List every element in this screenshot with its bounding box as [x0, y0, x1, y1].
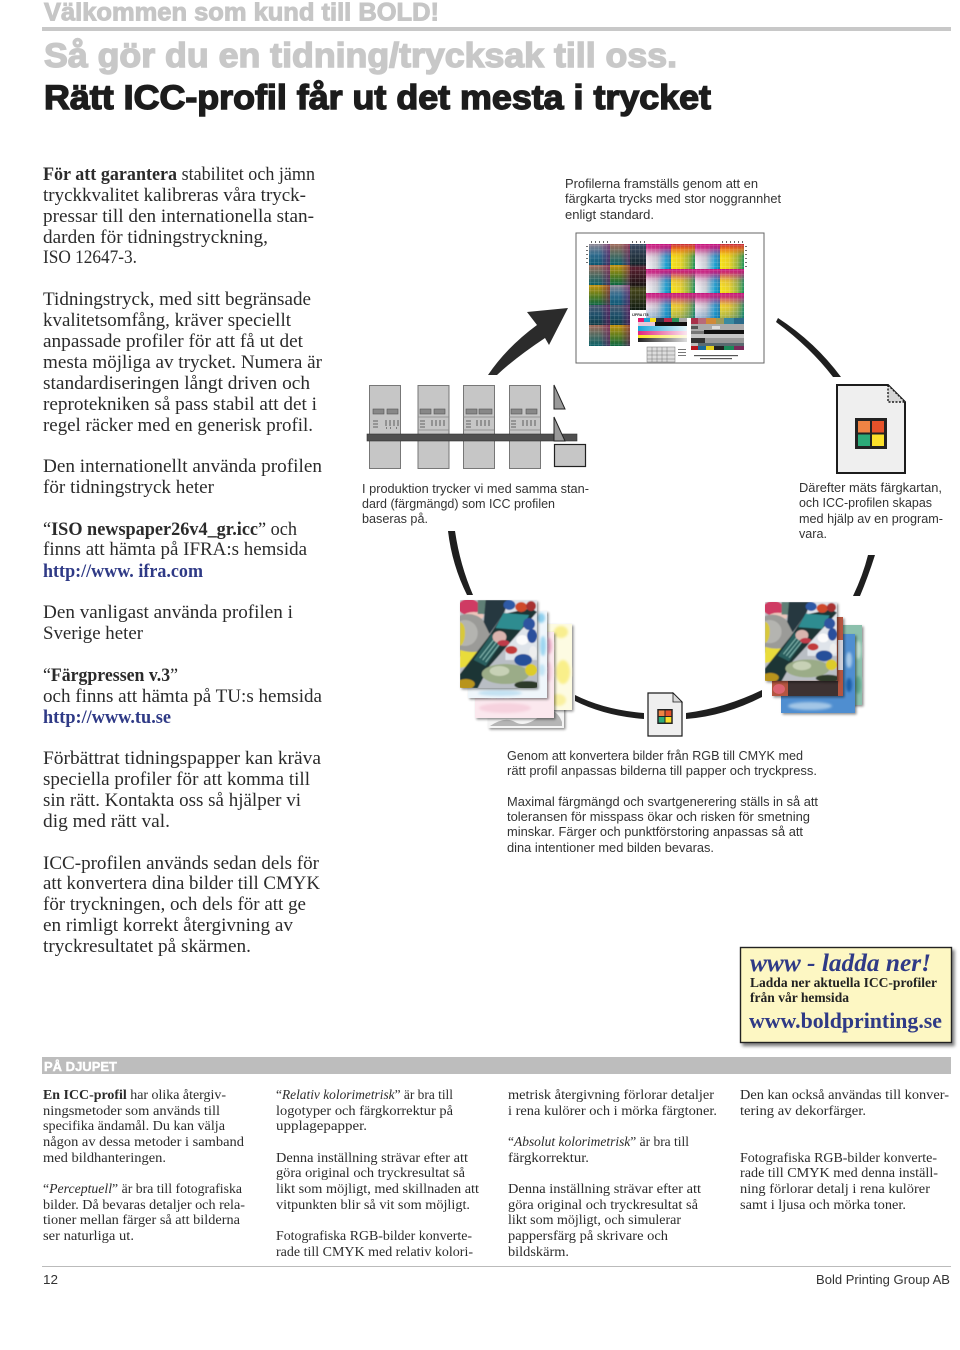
text block: main article column: en rimligt korrekt återgivning av	[43, 916, 294, 936]
text block: main article column: speciella profiler för att komma till	[43, 770, 310, 790]
section bar: på djupet	[42, 1057, 951, 1074]
text column 1: någon av dessa metoder i samband	[43, 1134, 244, 1149]
caption: conversion: rätt profil anpassas bilderna till papper och tryckpress.	[507, 764, 817, 778]
callout: download box: Ladda ner aktuella ICC-profiler	[750, 976, 937, 991]
text block: main article column: standardiseringen långt driven och	[43, 374, 310, 394]
text block: main article column: Den vanligast använda profilen i	[43, 603, 293, 623]
caption: production: dard (färgmängd) som ICC profilen	[362, 497, 555, 511]
caption: colour chart	[565, 177, 782, 222]
arc: press to images	[448, 531, 473, 595]
text block: main article column: sin rätt. Kontakta oss så hjälper vi	[43, 791, 301, 811]
caption: measuring: och ICC-profilen skapas	[799, 496, 932, 510]
arc: images to small profile	[575, 695, 644, 719]
sheet: blue	[781, 634, 855, 713]
title: Rätt ICC-profil får ut det mesta i trycket	[44, 79, 711, 117]
text block: main article column: Förbättrat tidningspapper kan kräva	[43, 749, 321, 769]
text block: main article column: http://www. ifra.com	[43, 562, 204, 582]
arrow: press to chart	[488, 308, 568, 375]
text block: main article column: “ISO newspaper26v4_gr.icc” och	[43, 520, 297, 540]
text block: main article column: och finns att hämta på TU:s hemsida	[43, 687, 322, 707]
text block: main article column: dig med rätt val.	[43, 812, 170, 832]
text column 2: vitpunkten blir så vit som möjligt.	[276, 1197, 470, 1212]
icon: small ICC profile file	[648, 693, 682, 736]
text block: main article column: Den internationellt använda profilen	[43, 457, 322, 477]
text column 3	[508, 1087, 717, 1259]
arc: small profile to images	[686, 690, 762, 719]
text block: main article column: tryckkvalitet kalibreras våra tryck-	[43, 186, 306, 206]
image stack: RGB original with CMYK separations	[446, 599, 572, 728]
text column 1: med bildhanteringen.	[43, 1150, 166, 1165]
callout: download box: www - ladda ner!	[750, 950, 931, 977]
text column 3: färgkorrektur.	[508, 1150, 589, 1165]
sheet: cyan separation	[468, 611, 547, 698]
sheet: magenta separation	[475, 632, 554, 718]
footer	[42, 1266, 951, 1287]
text column 2: Fotografiska RGB-bilder konverte-	[276, 1228, 472, 1243]
footer: Bold Printing Group AB	[816, 1273, 950, 1287]
text column 4: samt i ljusa och mörka toner.	[740, 1197, 906, 1212]
text block: main article column: för tryckningen, och dels för att ge	[43, 895, 306, 915]
press tower 2	[418, 386, 449, 468]
text column 4: Den kan också användas till konver-	[740, 1087, 949, 1102]
caption: measuring	[799, 481, 943, 541]
text block: main article column: Tidningstryck, med sitt begränsade	[43, 290, 311, 310]
text column 2: “Relativ kolorimetrisk” är bra till	[276, 1087, 453, 1102]
caption: conversion: Genom att konvertera bilder från RGB till CMYK med	[507, 749, 803, 763]
sheet: RGB image	[446, 599, 540, 689]
text block: main article column: reprotekniken så pass stabil att det i	[43, 395, 317, 415]
text column 3: “Absolut kolorimetrisk” är bra till	[508, 1134, 689, 1149]
text block: main article column: tryckresultatet på skärmen.	[43, 937, 251, 957]
chart: registration ticks	[587, 242, 746, 267]
text block: main article column: finns att hämta på IFRA:s hemsida	[43, 540, 307, 560]
chart: white panel and strips	[631, 310, 744, 362]
caption: measuring: Därefter mäts färgkartan,	[799, 481, 942, 495]
text column 4	[740, 1087, 949, 1212]
text column 3: metrisk återgivning förlorar detaljer	[508, 1087, 714, 1102]
text column 1: ningsmetoder som används till	[43, 1103, 220, 1118]
caption: conversion: toleransen för misspass ökar och risken för smetning	[507, 810, 810, 824]
text column 4: tering av dekorfärger.	[740, 1103, 866, 1118]
printing press	[367, 385, 586, 468]
text column 4: Fotografiska RGB-bilder konverte-	[740, 1150, 937, 1165]
caption: production: baseras på.	[362, 512, 428, 526]
text column 1: En ICC-profil har olika återgiv-	[43, 1087, 226, 1102]
folder triangle bottom	[554, 417, 565, 441]
text column 1: “Perceptuell” är bra till fotografiska	[43, 1181, 242, 1196]
caption: conversion: dina intentioner med bilden bevaras.	[507, 841, 714, 855]
caption: production	[362, 482, 589, 526]
text block: main article column	[43, 165, 322, 957]
text block: main article column: anpassade profiler för att få ut det	[43, 332, 304, 352]
header rule	[42, 27, 951, 31]
text column 1: tioner mellan färger så att bilderna	[43, 1212, 240, 1227]
section bar: på djupet: PÅ DJUPET	[44, 1059, 117, 1074]
text column 2: likt som möjligt, med skillnaden att	[276, 1181, 479, 1196]
sheet: red and dark	[772, 617, 843, 696]
colour chart	[576, 233, 764, 363]
caption: conversion: minskar. Färger och punktförstoring anpassas så att	[507, 825, 804, 839]
text column 3: Denna inställning strävar efter att	[508, 1181, 701, 1196]
text block: main article column: ICC-profilen används sedan dels för	[43, 854, 319, 874]
chart: dark colour blocks	[589, 244, 646, 346]
text block: main article column: “Färgpressen v.3”	[43, 666, 178, 686]
text column 1: specifika ändamål. Du kan välja	[43, 1118, 225, 1133]
caption: production: I produktion trycker vi med samma stan-	[362, 482, 589, 496]
text column 2: rade till CMYK med relativ kolori-	[276, 1244, 473, 1259]
press tower 4	[509, 386, 540, 468]
caption: colour chart: Profilerna framställs genom att en	[565, 177, 758, 191]
sheet: yellow separation	[495, 624, 572, 710]
arc: chart to profile	[776, 318, 841, 377]
image stack: CMYK result	[752, 601, 862, 713]
sheet: CMYK image	[752, 601, 840, 682]
sheet: black separation	[488, 660, 564, 728]
callout: download box: www.boldprinting.se	[749, 1008, 942, 1033]
text column 2: logotyper och färgkorrektur på	[276, 1103, 453, 1118]
sheet: green	[790, 625, 862, 705]
text column 4: ning förlorar detalj i rena kulörer	[740, 1181, 930, 1196]
text block: main article column: regel räcker med en generisk profil.	[43, 416, 313, 436]
section heading: Så gör du en tidning/trycksak till oss.	[44, 37, 677, 75]
text column 2: Denna inställning strävar efter att	[276, 1150, 468, 1165]
paper web bar	[367, 434, 577, 441]
arc: profile to images	[853, 555, 875, 596]
text column 2: göra original och tryckresultat så	[276, 1165, 465, 1180]
text column 3: pappersfärg på skrivare och	[508, 1228, 668, 1243]
text block: main article column: för tidningstryck heter	[43, 478, 214, 498]
text column 1: ser naturliga ut.	[43, 1228, 134, 1243]
callout: download box	[740, 948, 952, 1042]
folder triangle top	[554, 385, 565, 409]
text block: main article column: att konvertera dina bilder till CMYK	[43, 874, 321, 894]
press tower 1	[370, 386, 400, 468]
text column 1	[43, 1087, 245, 1243]
text block: main article column: För att garantera stabilitet och jämn	[43, 165, 315, 185]
output box	[554, 444, 586, 466]
icon: ICC profile file	[837, 385, 905, 473]
text block: main article column: pressar till den internationella stan-	[43, 207, 314, 227]
caption: measuring: med hjälp av en program-	[799, 512, 943, 526]
text block: main article column: Sverige heter	[43, 624, 143, 644]
text column 2: upplagepapper.	[276, 1118, 367, 1133]
caption: colour chart: färgkarta trycks med stor noggrannhet	[565, 192, 782, 206]
text column 1: bilder. Då bevaras detaljer och rela-	[43, 1197, 245, 1212]
text column 3: bildskärm.	[508, 1244, 569, 1259]
footer: 12	[43, 1273, 58, 1287]
caption: conversion: Maximal färgmängd och svartgenerering ställs in så att	[507, 795, 819, 809]
text block: main article column: darden för tidningstryckning,	[43, 228, 268, 248]
caption: measuring: vara.	[799, 527, 827, 541]
callout: download box: från vår hemsida	[750, 991, 849, 1006]
text block: main article column: http://www.tu.se	[43, 708, 171, 728]
text column 3: likt som möjligt, och simulerar	[508, 1212, 681, 1227]
text block: main article column: ISO 12647-3.	[43, 248, 137, 268]
text block: main article column: mesta möjliga av trycket. Numera är	[43, 353, 322, 373]
chart: white panel and strips: IJFRA IT8	[632, 313, 648, 317]
press tower 3	[463, 386, 494, 468]
text column 3: i rena kulörer och i mörka färgtoner.	[508, 1103, 717, 1118]
caption: colour chart: enligt standard.	[565, 208, 654, 222]
text column 4: rade till CMYK med denna inställ-	[740, 1165, 938, 1180]
caption: conversion	[507, 749, 819, 855]
chart: main colour grid	[589, 244, 744, 346]
text column 3: göra original och tryckresultat så	[508, 1197, 698, 1212]
text block: main article column: kvalitetsomfång, kräver speciellt	[43, 311, 292, 331]
text column 2	[276, 1087, 479, 1259]
